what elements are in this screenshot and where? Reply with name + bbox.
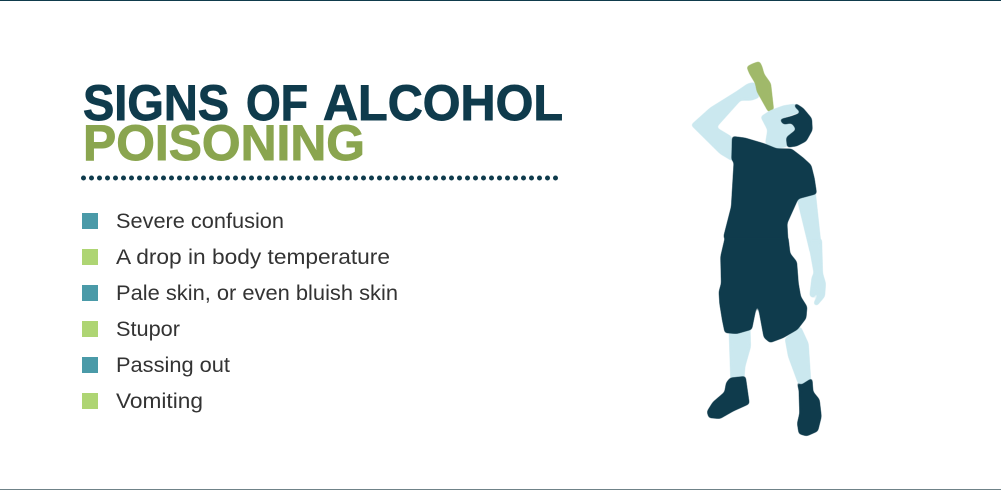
title line 2: POISONING	[83, 115, 365, 171]
item: severe confusion: Severe confusion	[116, 210, 284, 233]
hand	[807, 238, 826, 306]
item: passing out: Passing out	[116, 354, 230, 377]
item: stupor: Stupor	[116, 318, 180, 341]
head	[760, 104, 802, 149]
item: stupor	[82, 318, 180, 341]
shorts	[719, 237, 807, 343]
lowered arm	[797, 192, 822, 253]
right leg	[785, 326, 811, 385]
left boot	[707, 376, 750, 419]
title line 1	[83, 75, 563, 131]
title	[83, 75, 563, 171]
right boot	[796, 378, 822, 436]
title line 1: ALCOHOL	[323, 75, 563, 131]
item: pale skin: Pale skin, or even bluish skin	[116, 282, 398, 305]
shirt	[722, 136, 817, 253]
symptom list	[82, 210, 398, 413]
upper body	[691, 61, 822, 253]
left leg	[729, 325, 751, 380]
raised arm	[691, 82, 760, 162]
hair and beard	[779, 103, 813, 148]
bottle	[746, 61, 774, 112]
figure: man drinking from bottle	[691, 61, 826, 436]
title line 1: OF	[246, 75, 308, 131]
item: vomiting	[82, 390, 203, 413]
item: vomiting: Vomiting	[116, 390, 203, 413]
title line 1: SIGNS	[83, 75, 229, 131]
item: body temperature: A drop in body temperature	[116, 246, 390, 269]
lower body	[707, 237, 826, 436]
